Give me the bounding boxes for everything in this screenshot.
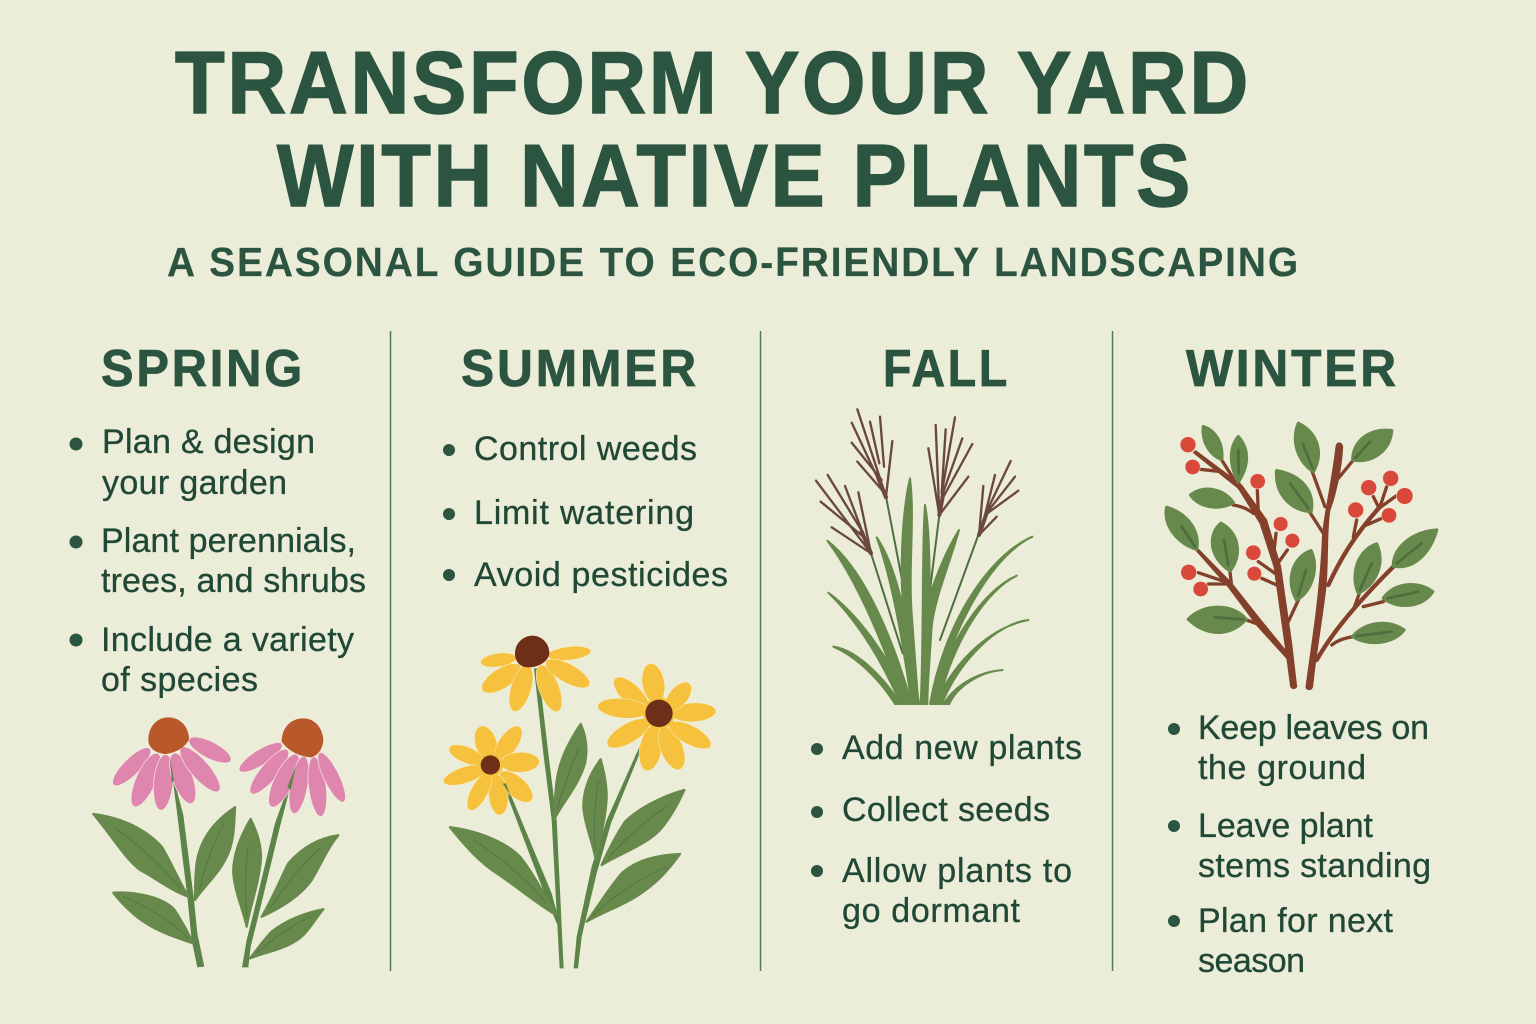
- bullet list: fall tasks: Add new plants: [842, 729, 1082, 767]
- icon: pink coneflowers: [93, 717, 351, 967]
- bullet list: spring tasks: [70, 423, 366, 699]
- icon: yellow black-eyed susans: [441, 636, 716, 968]
- bullet list: spring tasks: Include a variety: [101, 621, 354, 659]
- bullet list: spring tasks: trees, and shrubs: [101, 562, 366, 600]
- bullet list: fall tasks: Collect seeds: [842, 791, 1050, 829]
- panel: summer: [441, 340, 728, 968]
- panel: spring: [70, 340, 366, 967]
- bullet list: summer tasks: [443, 430, 728, 594]
- bullet list: fall tasks: [811, 729, 1082, 930]
- bullet list: fall tasks: go dormant: [842, 892, 1021, 930]
- heading: spring: SPRING: [101, 340, 305, 398]
- bullet list: summer tasks: Control weeds: [474, 430, 697, 468]
- bullet list: winter tasks: Leave plant: [1198, 807, 1374, 845]
- title: [175, 33, 1251, 225]
- title: WITH NATIVE PLANTS: [277, 126, 1193, 225]
- bullet list: spring tasks: Plan & design: [102, 423, 315, 461]
- bullet list: spring tasks: your garden: [102, 464, 287, 502]
- panel: fall: [811, 340, 1082, 930]
- heading: fall: FALL: [883, 340, 1010, 398]
- heading: summer: SUMMER: [461, 340, 699, 398]
- bullet list: winter tasks: the ground: [1198, 749, 1366, 787]
- bullet list: fall tasks: Allow plants to: [842, 852, 1072, 890]
- panel: winter: [1166, 340, 1437, 980]
- bullet list: summer tasks: Avoid pesticides: [474, 556, 728, 594]
- bullet list: winter tasks: Keep leaves on: [1198, 709, 1429, 747]
- bullet list: winter tasks: stems standing: [1198, 847, 1431, 885]
- bullet list: winter tasks: [1168, 709, 1431, 980]
- icon: winterberry branches: [1166, 423, 1437, 690]
- bullet list: spring tasks: of species: [101, 661, 258, 699]
- bullet list: spring tasks: Plant perennials,: [101, 522, 356, 560]
- bullet list: summer tasks: Limit watering: [474, 494, 694, 532]
- icon: ornamental grass with brown plumes: [816, 409, 1032, 704]
- bullet list: winter tasks: season: [1198, 942, 1305, 980]
- heading: winter: WINTER: [1186, 340, 1399, 398]
- subtitle: A SEASONAL GUIDE TO ECO-FRIENDLY LANDSCAPING: [167, 239, 1300, 285]
- bullet list: winter tasks: Plan for next: [1198, 902, 1394, 940]
- title: TRANSFORM YOUR YARD: [175, 33, 1251, 132]
